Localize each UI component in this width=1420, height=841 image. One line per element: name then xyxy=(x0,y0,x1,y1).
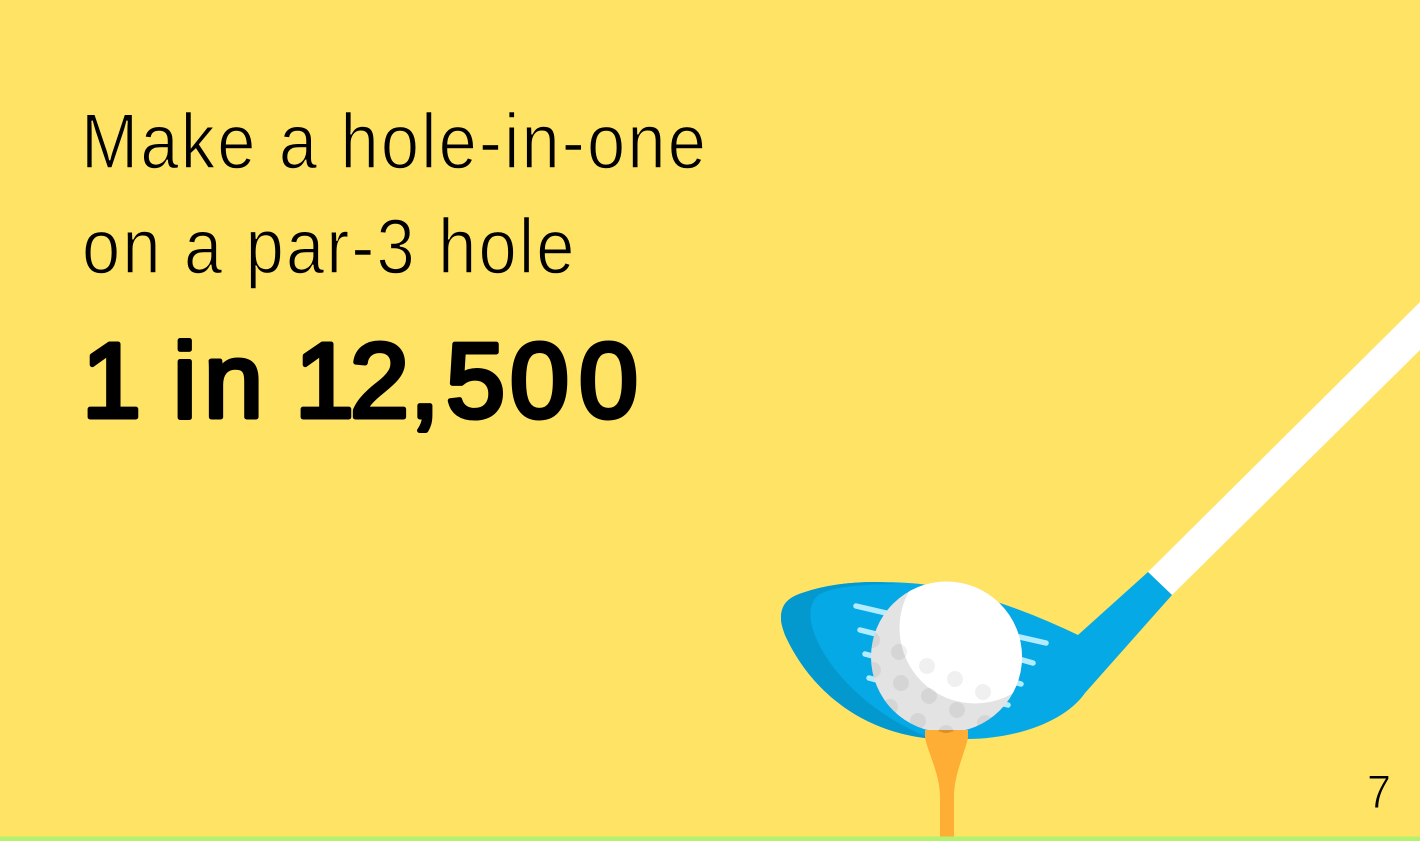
ground strip xyxy=(0,836,1420,841)
icon: golf club shaft xyxy=(1148,302,1420,595)
tee shadow: dimple over tee xyxy=(938,730,954,733)
icon: golf tee xyxy=(925,730,968,836)
icon: golf ball xyxy=(871,582,1022,732)
odds figure: 1 in 12,500 xyxy=(82,322,638,440)
ball dimples xyxy=(872,633,991,732)
heading: line one: Make a hole-in-one xyxy=(81,97,708,185)
page number: 7 xyxy=(1367,765,1391,818)
speed lines xyxy=(856,606,1046,705)
heading: line two: on a par-3 hole xyxy=(82,202,577,290)
icon: golf club head xyxy=(781,572,1172,739)
